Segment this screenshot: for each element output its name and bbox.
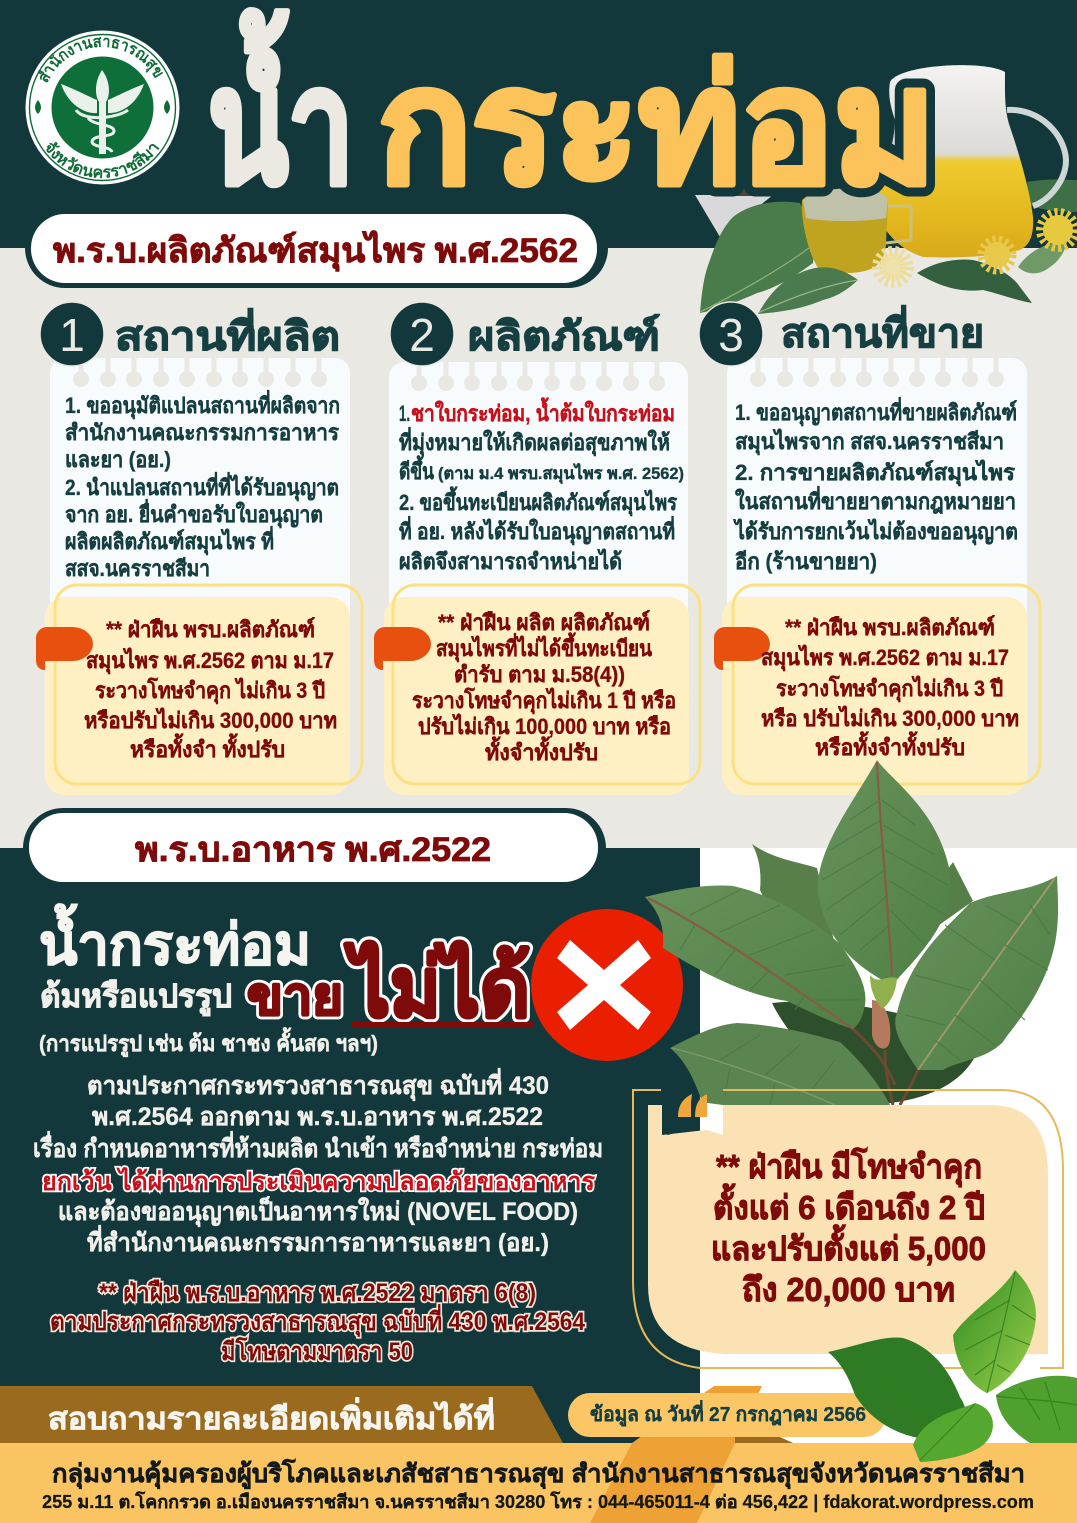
illustration: herbal tea jug, cup, bowl and leaves [695,65,1077,314]
callout: penalty box 2: ตำรับ ตาม ม.58(4)) [454,662,625,687]
text block: food act penalty: ** ฝ่าฝืน พ.ร.บ.อาหาร พ.ศ.2522 มาตรา 6(8) [99,1279,536,1307]
step 1 heading: สถานที่ผลิต [115,308,340,359]
step 3 heading: สถานที่ขาย [781,305,984,356]
text block: kratom water cannot be sold [39,904,533,1058]
callout: penalty box 3: หรือทั้งจำทั้งปรับ [815,731,965,760]
panel: note card 3: สมุนไพรจาก สสจ.นครราชสีมา [735,428,1004,456]
callout: penalty box 3: หรือ ปรับไม่เกิน 300,000 บาท [761,705,1019,731]
panel: note card 2: ดีขึ้น [399,455,434,484]
text block: announcement details: ที่สำนักงานคณะกรรมการอาหารและยา (อย.) [87,1225,549,1257]
panel: note card 3 [727,358,1027,638]
heading pill: food act [23,808,606,888]
text block: announcement details: เรื่อง กำหนดอาหารที่ห้ามผลิต นำเข้า หรือจำหน่าย กระท่อม [33,1131,603,1163]
callout: penalty box 2: ทั้งจำทั้งปรับ [485,736,598,765]
text block: food act penalty: มีโทษตามมาตรา 50 [221,1336,413,1366]
callout: penalty box 1: ระวางโทษจำคุก ไม่เกิน 3 ปี [95,677,325,705]
date pill [568,1393,886,1437]
step 2 heading [390,302,660,366]
panel: note card 2: ผลิตจึงสามารถจำหน่ายได้ [399,548,622,574]
panel: note card 1: สำนักงานคณะกรรมการอาหาร [65,420,339,445]
callout: penalty box 2: ** ฝ่าฝืน ผลิต ผลิตภัณฑ์ [438,610,650,635]
panel: note card 3: ในสถานที่ขายยาตามกฎหมายยา [735,485,1016,514]
callout: penalty box 3: ระวางโทษจำคุกไม่เกิน 3 ปี [776,675,1003,703]
panel: note card 1: 1. ขออนุมัติแปลนสถานที่ผลิตจาก [65,389,340,420]
panel: note card 3: อีก (ร้านขายยา) [735,549,877,574]
callout: penalty box 2: ปรับไม่เกิน 100,000 บาท หรือ [418,713,671,739]
step 2 heading: ผลิตภัณฑ์ [468,314,660,359]
title: น้ำกระท่อม: น้ำ [208,10,354,216]
panel: note card 1: จาก อย. ยื่นคำขอรับใบอนุญาต [65,498,323,529]
icon: red circle with white X [531,909,683,1061]
illustration: kratom plant [645,760,1058,1105]
illustration: bright green leaves bottom right [828,1270,1077,1462]
panel: note card 3: 2. การขายผลิตภัณฑ์สมุนไพร [735,459,1015,487]
panel: note card 2: ชาใบกระท่อม, น้ำต้มใบกระท่อม [411,397,675,426]
title: น้ำกระท่อม [208,10,936,216]
footer: contact bar: 255 ม.11 ต.โคกกรวด อ.เมืองนครราชสีมา จ.นครราชสีมา 30280 โทร : 044-465011-4 ต่อ 456,422 | fdakorat.wordpress.com [42,1491,1034,1512]
text block: food act penalty [50,1279,585,1366]
panel: note card 2 [389,362,688,638]
text block: kratom water cannot be sold: (การแปรรูป เช่น ต้ม ชาชง คั้นสด ฯลฯ) [39,1027,378,1058]
panel: note card 1: 2. นำแปลนสถานที่ที่ได้รับอนุญาต [65,471,339,502]
quote box: penalty summary [633,1090,1063,1368]
text block: announcement details [33,1068,603,1257]
background: dark lower panel [0,848,700,1448]
step 1 heading [40,302,340,366]
panel: note card 2: ที่มุ่งหมายให้เกิดผลต่อสุขภาพให้ [399,426,670,457]
callout: penalty box 2: สมุนไพรที่ไม่ได้ขึ้นทะเบียน [436,632,652,663]
step 1 heading: 1 [59,309,85,361]
text block: kratom water cannot be sold: ขาย [247,968,343,1026]
panel: note card 2: (ตาม ม.4 พรบ.สมุนไพร พ.ศ. 2562) [438,463,684,484]
banner: contact heading [0,1386,563,1443]
text block: kratom water cannot be sold: ต้มหรือแปรรูป [40,978,232,1017]
callout: penalty box 3 [714,585,1040,795]
callout: penalty box 2 [374,585,700,795]
background: beige middle section [0,248,1077,848]
quote box: penalty summary: และปรับตั้งแต่ 5,000 [711,1224,986,1267]
callout: penalty box 3: สมุนไพร พ.ศ.2562 ตาม ม.17 [761,644,1009,672]
panel: note card 2: 2. ขอขึ้นทะเบียนผลิตภัณฑ์สมุนไพร [399,486,677,517]
title: น้ำกระท่อม: กระท่อม [378,37,936,216]
panel: note card 3: 1. ขออนุญาตสถานที่ขายผลิตภัณฑ์ [735,396,1017,427]
callout: penalty box 1: ** ฝ่าฝืน พรบ.ผลิตภัณฑ์ [106,617,315,642]
panel: note card 1: และยา (อย.) [65,447,171,472]
heading pill: herbal products act: พ.ร.บ.ผลิตภัณฑ์สมุนไพร พ.ศ.2562 [53,230,578,272]
step 2 heading: 2 [409,309,435,361]
logo: provincial health office seal [26,30,180,184]
footer: contact bar: กลุ่มงานคุ้มครองผู้บริโภคและเภสัชสาธารณสุข สำนักงานสาธารณสุขจังหวัดนครราชสีมา [52,1458,1025,1490]
callout: penalty box 2: ระวางโทษจำคุกไม่เกิน 1 ปี หรือ [412,687,676,715]
callout: penalty box 1: หรือทั้งจำ ทั้งปรับ [130,733,285,762]
panel: note card 3: ได้รับการยกเว้นไม่ต้องขออนุญาต [733,518,1018,546]
logo: provincial health office seal: สำนักงานสาธารณสุข [38,36,163,82]
text block: announcement details: ยกเว้น ได้ผ่านการประเมินความปลอดภัยของอาหาร [42,1166,596,1196]
heading pill: food act: พ.ร.บ.อาหาร พ.ศ.2522 [135,831,491,869]
step 3 heading [699,302,984,366]
panel: note card 1: สสจ.นครราชสีมา [65,556,210,581]
quote box: penalty summary: ตั้งแต่ 6 เดือนถึง 2 ปี [713,1183,985,1226]
text block: kratom water cannot be sold: ขาย [247,968,343,1026]
callout: penalty box 3: ** ฝ่าฝืน พรบ.ผลิตภัณฑ์ [785,615,995,640]
text block: announcement details: และต้องขออนุญาตเป็นอาหารใหม่ (NOVEL FOOD) [58,1196,578,1228]
panel: note card 1: ผลิตผลิตภัณฑ์สมุนไพร ที่ [65,525,274,556]
text block: announcement details: พ.ศ.2564 ออกตาม พ.ร.บ.อาหาร พ.ศ.2522 [92,1103,543,1131]
panel: note card 2: ที่ อย. หลังได้รับใบอนุญาตสถานที่ [399,515,675,546]
panel: note card 1 [50,358,350,638]
text block: announcement details: ตามประกาศกระทรวงสาธารณสุข ฉบับที่ 430 [87,1068,549,1102]
footer: contact bar [0,1386,1077,1523]
background: white lower right [700,848,1077,1448]
text block: food act penalty: ตามประกาศกระทรวงสาธารณสุข ฉบับที่ 430 พ.ศ.2564 [50,1304,585,1338]
background: dark header band [0,0,1077,248]
quote box: penalty summary: ถึง 20,000 บาท [742,1271,955,1308]
text block: kratom water cannot be sold: ไม่ได้ [343,941,530,1034]
title: น้ำกระท่อม: กระท่อม [378,37,936,216]
text block: kratom water cannot be sold: น้ำกระท่อม [39,904,311,976]
step 3 heading: 3 [718,309,744,361]
quote box: penalty summary: ** ฝ่าฝืน มีโทษจำคุก [716,1147,982,1188]
logo: provincial health office seal: จังหวัดนครราชสีมา [46,142,160,178]
icon: orange quotation marks [678,1094,707,1117]
callout: penalty box 1 [36,585,362,795]
callout: penalty box 1: สมุนไพร พ.ศ.2562 ตาม ม.17 [86,647,334,675]
heading pill: herbal products act [25,208,608,288]
banner: contact heading: สอบถามรายละเอียดเพิ่มเติมได้ที่ [48,1397,495,1436]
text block: kratom water cannot be sold: ไม่ได้ [343,941,530,1034]
date pill: ข้อมูล ณ วันที่ 27 กรกฎาคม 2566 [590,1399,866,1428]
panel: note card 2: 1. [399,401,410,426]
callout: penalty box 1: หรือปรับไม่เกิน 300,000 บาท [84,707,337,733]
